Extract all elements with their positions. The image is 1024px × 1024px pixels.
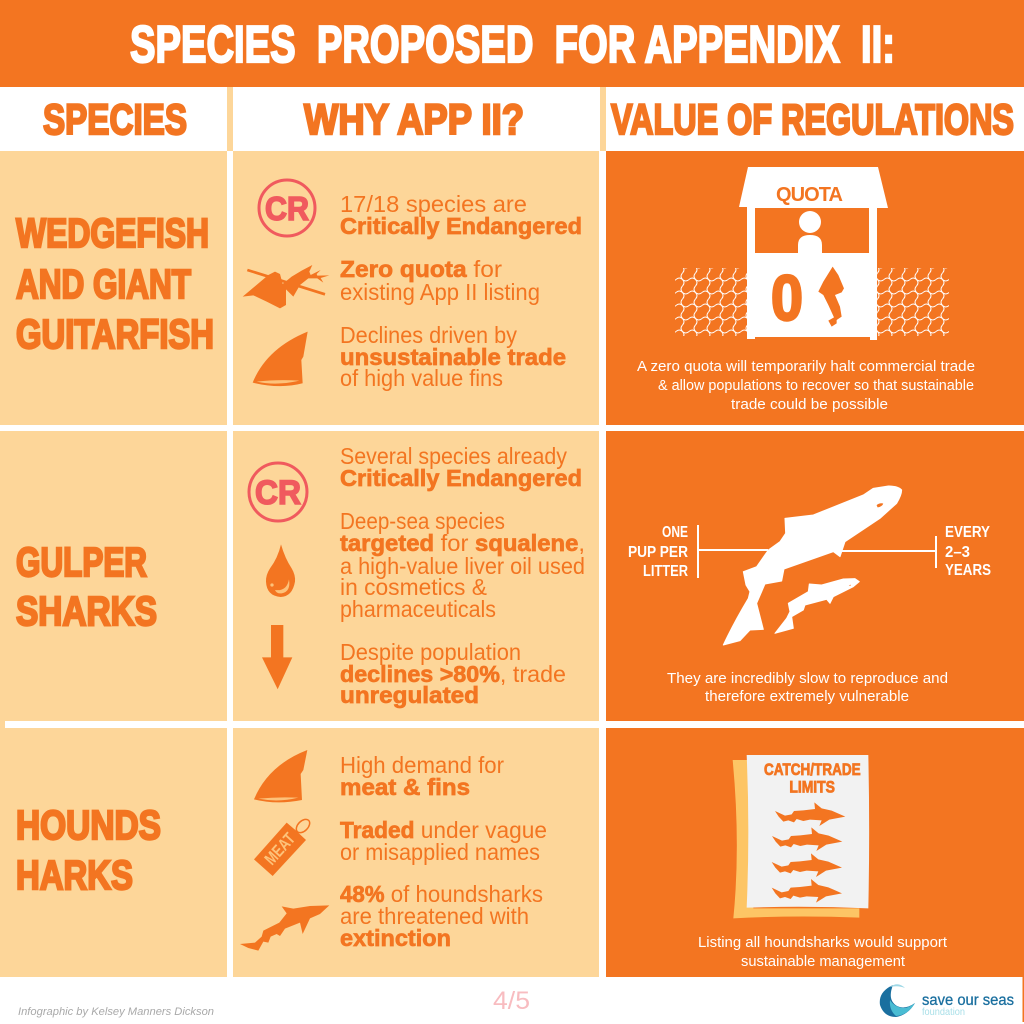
- icon: critically endangered badge, row 1: CR: [265, 190, 309, 227]
- label: one pup per litter: LITTER: [643, 563, 688, 580]
- text: 48% threatened: extinction: [340, 925, 451, 951]
- text: high demand: High demand for: [340, 752, 504, 778]
- text: population declines: Despite population: [340, 639, 521, 665]
- panel: catch and trade limits document: [733, 755, 869, 918]
- label: every 2-3 years: [945, 524, 991, 579]
- text: several species critically endangered: Critically Endangered: [340, 465, 582, 491]
- text: high demand: [340, 752, 504, 800]
- text: declines driven by unsustainable trade: [340, 322, 566, 391]
- text: zero quota value: [637, 358, 975, 413]
- panel: slow reproduction illustration: [628, 486, 991, 645]
- text: listing houndsharks: [698, 934, 948, 970]
- text: 48% threatened: 48% of houndsharks: [340, 881, 543, 907]
- icon: adult gulper shark: [723, 486, 902, 645]
- text: zero quota value: A zero quota will temporarily halt commercial trade: [637, 358, 975, 375]
- text: 48% threatened: are threatened with: [340, 903, 529, 929]
- icon: finned shark on a rod: [243, 265, 329, 308]
- species name: gulper sharks: [16, 539, 157, 634]
- text: traded under vague names: or misapplied names: [340, 839, 540, 865]
- text: population declines: [340, 639, 566, 708]
- shark row 1: [775, 802, 845, 826]
- species name: houndsharks: [16, 802, 161, 898]
- text: listing houndsharks: Listing all houndsharks would support: [698, 934, 948, 951]
- species name: wedgefish and giant guitarfish: AND GIANT: [16, 261, 191, 307]
- species name: wedgefish and giant guitarfish: [16, 210, 214, 357]
- text: traded under vague names: [340, 817, 547, 865]
- species name: gulper sharks: SHARKS: [16, 588, 157, 634]
- species name: wedgefish and giant guitarfish: WEDGEFISH: [16, 210, 209, 256]
- text: declines driven by unsustainable trade: unsustainable trade: [340, 344, 566, 370]
- icon: critically endangered badge, row 2: [249, 463, 307, 521]
- back sheet: [733, 760, 859, 918]
- species name: houndsharks: HOUNDS: [16, 802, 161, 848]
- text: several species critically endangered: Several species already: [340, 443, 567, 469]
- document heading: LIMITS: [789, 778, 835, 797]
- icon: meat tag: [254, 817, 312, 876]
- text: slow to reproduce: They are incredibly slow to reproduce and: [667, 670, 948, 687]
- text: high demand: meat & fins: [340, 774, 470, 800]
- fishing net, left: [675, 268, 747, 336]
- quota stall: QUOTA: [776, 184, 843, 206]
- title banner: [0, 0, 1024, 87]
- label: one pup per litter: PUP PER: [628, 544, 688, 561]
- icon: houndshark: [240, 905, 329, 951]
- icon: critically endangered badge, row 1: [259, 180, 315, 236]
- text: 17/18 species critically endangered: [340, 191, 582, 239]
- shark row 3: [772, 853, 842, 877]
- label: one pup per litter: [628, 524, 688, 580]
- icon: shark fin, row 3: [254, 750, 307, 802]
- icon: dried fish: [818, 267, 844, 327]
- logo: save our seas foundation: [880, 984, 1014, 1018]
- label: one pup per litter: ONE: [662, 524, 688, 541]
- text: deep-sea species squalene: in cosmetics &: [340, 574, 487, 600]
- shark row 4: [772, 879, 842, 903]
- icon: pup gulper shark: [775, 579, 859, 633]
- document heading: [764, 760, 861, 797]
- shark row 2: [772, 827, 842, 851]
- text: deep-sea species squalene: [340, 508, 585, 622]
- text: 17/18 species critically endangered: Critically Endangered: [340, 213, 582, 239]
- logo: save our seas foundation: save our seas: [922, 992, 1014, 1009]
- logo: save our seas foundation: foundation: [922, 1007, 965, 1018]
- text: zero quota value: trade could be possible: [731, 396, 888, 413]
- text: population declines: declines >80%, trade: [340, 661, 566, 687]
- text: zero quota value: & allow populations to recover so that sustainable: [658, 377, 974, 394]
- front sheet: [747, 755, 869, 908]
- text: deep-sea species squalene: pharmaceuticals: [340, 596, 496, 622]
- text: 17/18 species critically endangered: 17/18 species are: [340, 191, 527, 217]
- quota stall: [739, 167, 888, 340]
- text: deep-sea species squalene: Deep-sea species: [340, 508, 505, 534]
- fishing net, right: [877, 268, 949, 336]
- label: every 2-3 years: 2–3: [945, 544, 970, 561]
- credit line: Infographic by Kelsey Manners Dickson: [18, 1006, 214, 1018]
- species name: gulper sharks: GULPER: [16, 539, 147, 585]
- document heading: CATCH/TRADE: [764, 760, 861, 779]
- text: declines driven by unsustainable trade: of high value fins: [340, 365, 503, 391]
- text: listing houndsharks: sustainable management: [741, 953, 906, 970]
- text: zero quota: existing App II listing: [340, 279, 540, 305]
- panel: quota illustration: [675, 167, 949, 340]
- text: declines driven by unsustainable trade: Declines driven by: [340, 322, 517, 348]
- text: 48% threatened: [340, 881, 543, 951]
- species name: houndsharks: HARKS: [16, 852, 133, 898]
- text: several species critically endangered: [340, 443, 582, 491]
- icon: meat tag: MEAT: [261, 829, 299, 869]
- timeline bars: [697, 525, 937, 578]
- icon: oil drop: [266, 544, 295, 597]
- text: slow to reproduce: [667, 670, 948, 705]
- icon: down arrow: [262, 625, 292, 689]
- text: deep-sea species squalene: a high-value liver oil used: [340, 553, 585, 579]
- text: deep-sea species squalene: targeted for squalene,: [340, 530, 585, 556]
- text: traded under vague names: Traded under vague: [340, 817, 547, 843]
- text: population declines: unregulated: [340, 682, 479, 708]
- column headers: WHY APP II?: [304, 96, 524, 144]
- icon: critically endangered badge, row 2: CR: [255, 474, 301, 512]
- column headers: SPECIES: [43, 96, 187, 144]
- text: slow to reproduce: therefore extremely vulnerable: [705, 688, 909, 705]
- column headers: [43, 87, 1014, 151]
- label: every 2-3 years: EVERY: [945, 524, 991, 541]
- text: zero quota: Zero quota for: [340, 256, 502, 282]
- label: every 2-3 years: YEARS: [945, 562, 991, 579]
- quota stall: 0: [771, 262, 803, 334]
- species name: wedgefish and giant guitarfish: GUITARFISH: [16, 311, 214, 357]
- icon: shark fin, row 1: [253, 332, 308, 386]
- text: zero quota: [340, 256, 540, 305]
- page number: 4/5: [493, 987, 530, 1015]
